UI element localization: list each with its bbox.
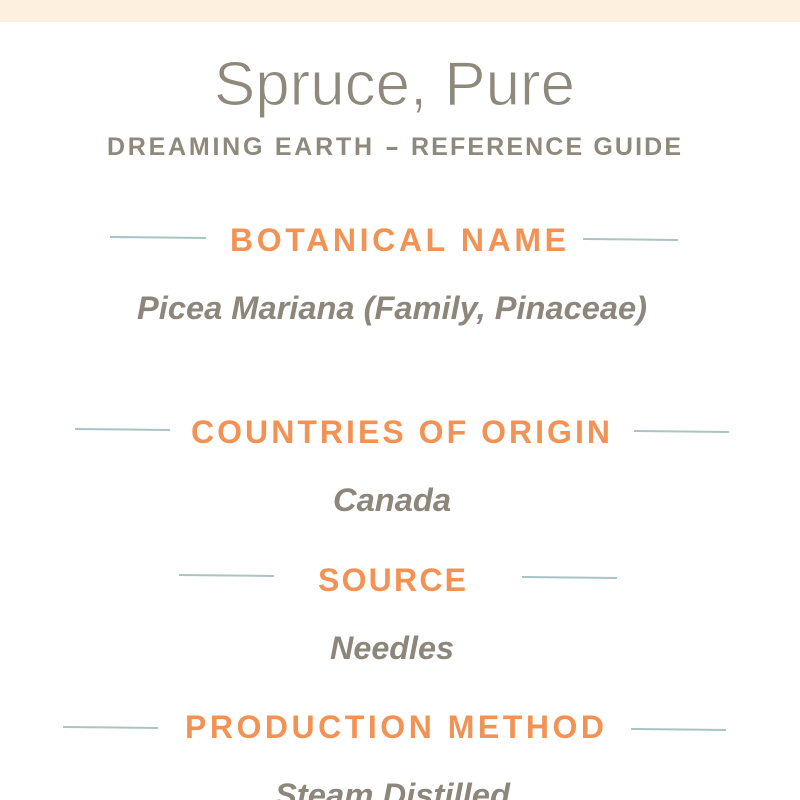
subtitle: REFERENCE GUIDE [411, 133, 681, 161]
top cream band [0, 0, 800, 22]
subtitle: DREAMING EARTH [107, 133, 372, 161]
value: source: Needles [330, 630, 454, 666]
value: botanical name: Picea Mariana (Family, Pinaceae) [137, 290, 647, 326]
section: botanical name [110, 222, 678, 326]
heading: production method: PRODUCTION METHOD [185, 709, 604, 745]
value: countries of origin: Canada [333, 482, 451, 518]
section: source [179, 562, 617, 666]
heading: countries of origin: COUNTRIES OF ORIGIN [191, 414, 610, 450]
section: countries of origin [75, 414, 729, 518]
title: Spruce, Pure [214, 50, 575, 119]
section: production method [63, 709, 726, 800]
heading: source: SOURCE [318, 562, 466, 598]
subtitle [107, 133, 681, 161]
heading: botanical name: BOTANICAL NAME [230, 222, 566, 258]
subtitle: - [385, 133, 399, 161]
